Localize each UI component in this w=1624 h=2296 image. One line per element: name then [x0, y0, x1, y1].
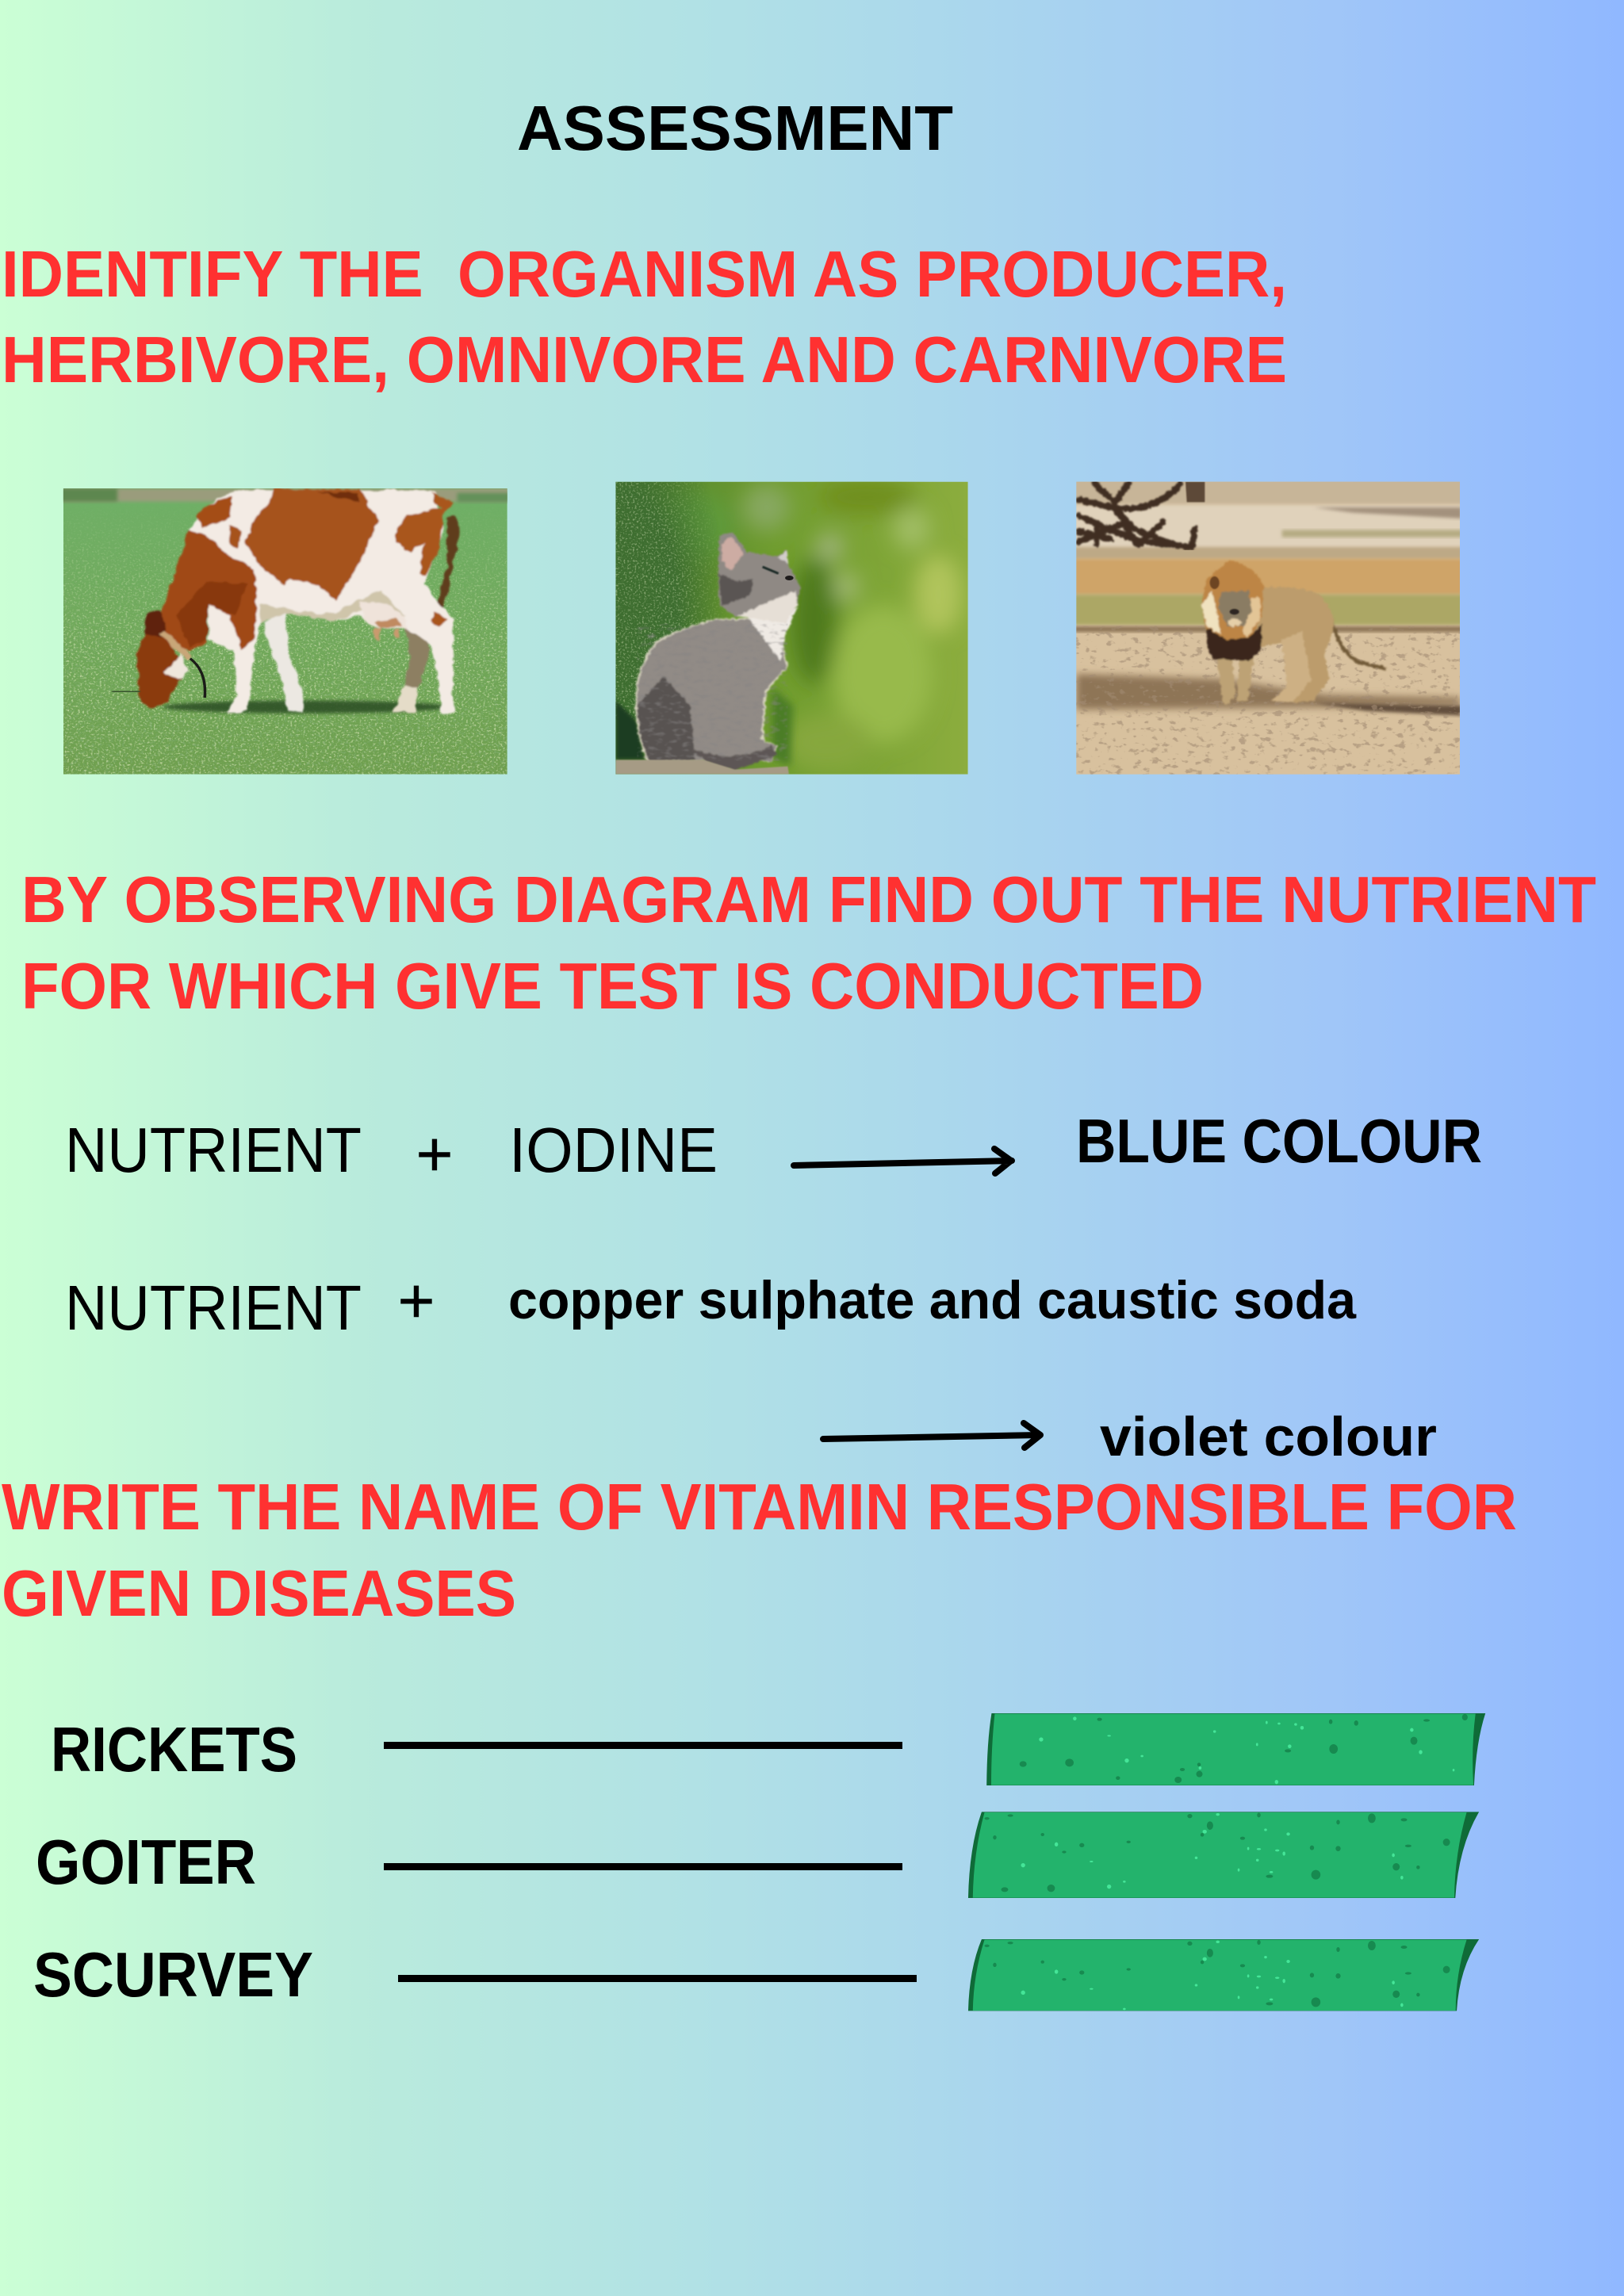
lion mane: [1201, 561, 1263, 641]
heading: nutrient test: FOR WHICH GIVE TEST IS CONDUCTED: [21, 949, 1204, 1023]
body: [189, 490, 456, 714]
row: goiter: GOITER: [36, 1827, 256, 1897]
equation: biuret test: NUTRIENT: [65, 1272, 362, 1343]
kitten body: [637, 620, 787, 761]
row: scurvey: [33, 1939, 917, 2010]
equation: iodine test: +: [416, 1119, 453, 1189]
answer strip: goiter: [968, 1812, 1479, 1898]
equation: biuret test: [65, 1265, 1437, 1468]
far hind leg: [393, 626, 430, 712]
answer strip: scurvey: [968, 1939, 1479, 2019]
equation: biuret test: copper sulphate and caustic soda: [508, 1270, 1357, 1330]
equation: biuret test: +: [398, 1265, 435, 1336]
heading: vitamins: GIVEN DISEASES: [2, 1556, 516, 1630]
udder: [360, 602, 408, 629]
heading: vitamins: WRITE THE NAME OF VITAMIN RESPONSIBLE FOR: [2, 1470, 1517, 1544]
heading: identify the organism: HERBIVORE, OMNIVORE AND CARNIVORE: [2, 323, 1287, 396]
photo: lion: [1073, 478, 1465, 776]
arrow: biuret result: [823, 1423, 1040, 1448]
equation: iodine test: IODINE: [509, 1115, 718, 1185]
lion face: [1219, 591, 1251, 626]
photo: kitten: [615, 478, 968, 775]
row: goiter: [36, 1827, 902, 1897]
far foreleg: [263, 610, 304, 712]
answer strip: rickets: [986, 1713, 1485, 1785]
equation: iodine test: NUTRIENT: [65, 1115, 362, 1185]
equation: iodine test: [65, 1106, 1482, 1189]
heading: identify the organism: [2, 237, 1287, 396]
kitten head: [718, 533, 800, 624]
lion tail: [1331, 618, 1385, 668]
row: rickets: [51, 1714, 902, 1785]
kitten chest: [743, 608, 797, 660]
arrow: iodine result: [794, 1149, 1012, 1173]
head: [144, 610, 165, 642]
lion forelegs: [1216, 652, 1254, 706]
brown patches: [160, 530, 256, 652]
fern: [615, 482, 720, 720]
photo: cow grazing: [59, 488, 511, 775]
row: rickets: RICKETS: [51, 1714, 297, 1785]
equation: biuret test: violet colour: [1100, 1406, 1437, 1468]
heading: nutrient test: [21, 863, 1596, 1023]
kitten halo: [635, 618, 788, 762]
title: ASSESSMENT: [517, 93, 953, 163]
tree: [1078, 484, 1195, 547]
tail: [438, 515, 458, 608]
rock: [615, 760, 789, 775]
lion body: [1255, 587, 1335, 702]
heading: vitamins: [2, 1470, 1517, 1630]
row: scurvey: SCURVEY: [33, 1939, 313, 2010]
equation: iodine test: BLUE COLOUR: [1076, 1106, 1482, 1176]
heading: identify the organism: IDENTIFY THE ORGANISM AS PRODUCER,: [2, 237, 1287, 311]
